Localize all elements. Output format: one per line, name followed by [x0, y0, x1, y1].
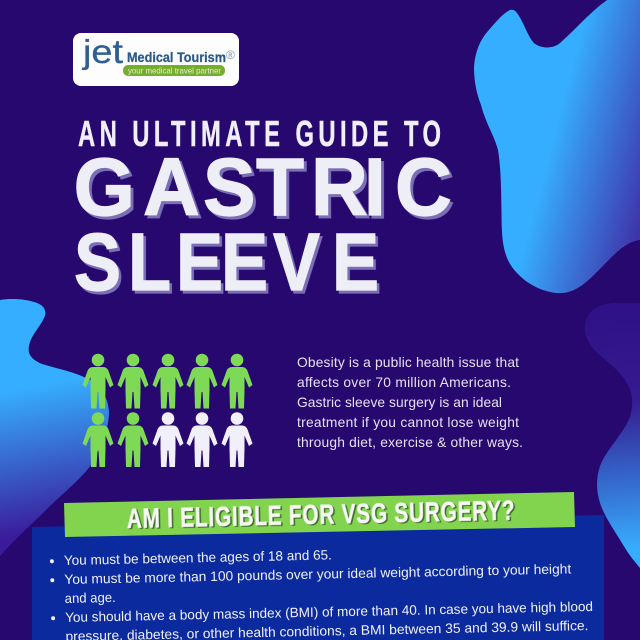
title: gastric: GASTRIC — [74, 142, 452, 233]
intro paragraph: Obesity is a public health issue that — [297, 355, 519, 370]
people icons: 7 of 10 — [82, 354, 252, 467]
banner heading text: AM I ELIGIBLE FOR VSG SURGERY? — [126, 496, 515, 535]
item: weight: You must be more than 100 pounds over your ideal weight according to your height — [64, 561, 572, 587]
blob: left gradient shape — [0, 299, 109, 556]
item: age: You must be between the ages of 18 and 65. — [64, 547, 332, 568]
blob: top right gradient shape — [474, 0, 640, 293]
banner shape — [64, 492, 575, 537]
banner: eligibility heading — [64, 492, 575, 537]
row two white people — [152, 412, 252, 467]
intro paragraph: Gastric sleeve surgery is an ideal — [297, 395, 502, 410]
row one green people — [82, 354, 252, 408]
bullet 2 — [50, 578, 54, 582]
row two green people — [82, 412, 148, 467]
logo registered mark: ® — [226, 48, 235, 62]
logo card — [73, 33, 239, 86]
title: sleeve: SLEEVE — [74, 217, 379, 308]
bullet 1 — [50, 559, 54, 563]
eligibility list — [50, 542, 594, 640]
logo — [73, 33, 239, 86]
blob: right gradient shape — [585, 303, 640, 568]
logo word: jet: jet — [82, 33, 123, 70]
item: weight continued: and age. — [65, 590, 116, 606]
logo tagline pill — [123, 65, 225, 76]
intro paragraph — [297, 355, 523, 450]
intro paragraph: treatment if you cannot lose weight — [297, 415, 519, 430]
item: BMI: You should have a body mass index (BMI) of more than 40. In case you have high blood — [65, 599, 593, 625]
intro paragraph: affects over 70 million Americans. — [297, 375, 511, 390]
title: an ultimate guide to: AN ULTIMATE GUIDE TO — [78, 114, 441, 154]
bullet 3 — [51, 616, 55, 620]
intro paragraph: through diet, exercise & other ways. — [297, 435, 523, 450]
panel: eligibility — [32, 515, 604, 640]
logo word: Medical Tourism: Medical Tourism — [127, 50, 226, 65]
logo tagline: your medical travel partner — [128, 66, 221, 76]
